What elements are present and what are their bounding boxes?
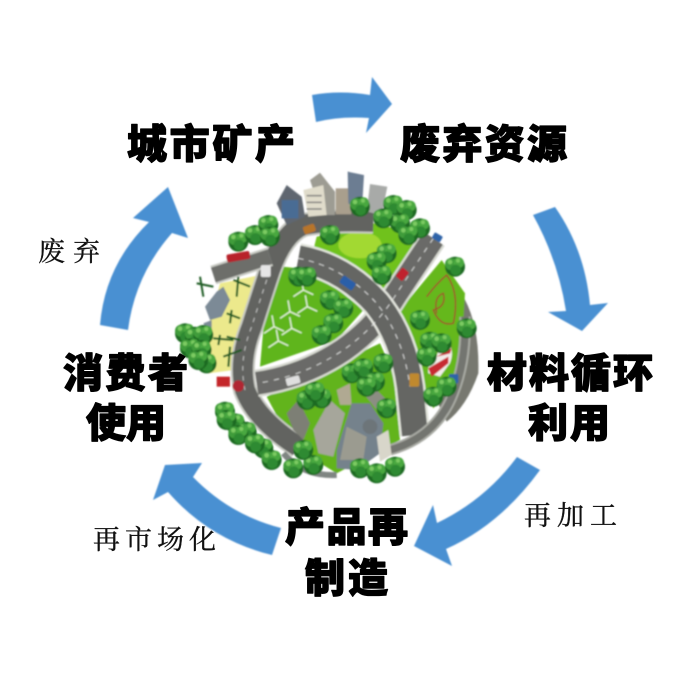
heading: consumer use: 消费者 xyxy=(63,352,188,396)
green land patches xyxy=(208,223,465,473)
carousel and red track xyxy=(427,275,456,377)
arrow: city mining to waste resources xyxy=(312,77,392,133)
cars xyxy=(217,223,458,392)
heading: material recycling: 材料循环 xyxy=(487,352,653,396)
bottom city buildings xyxy=(287,383,392,470)
heading: product remanufacturing xyxy=(285,506,408,601)
heading: consumer use: 使用 xyxy=(86,402,166,446)
heading: consumer use xyxy=(63,352,188,446)
arrow: remanufacturing to consumers xyxy=(153,463,281,555)
rocky rim xyxy=(433,287,478,422)
arrow: waste resources to material recycling xyxy=(533,207,608,331)
heading: city mining: 城市矿产 xyxy=(127,123,295,167)
label: reprocessing: 再加工 xyxy=(524,501,617,531)
arrow: material recycling to remanufacturing xyxy=(414,457,540,566)
heading: product remanufacturing: 制造 xyxy=(305,557,388,601)
top city buildings xyxy=(277,172,387,225)
globe illustration xyxy=(175,172,478,483)
heading: material recycling: 利用 xyxy=(528,402,610,446)
wind turbines xyxy=(264,279,317,348)
solar panels and palms xyxy=(197,277,250,367)
arrow: consumers to city mining xyxy=(100,187,188,330)
label: discard: 废弃 xyxy=(38,237,100,267)
heading: material recycling xyxy=(487,352,653,446)
roads xyxy=(213,221,465,475)
heading: product remanufacturing: 产品再 xyxy=(285,506,408,550)
heading: waste resources: 废弃资源 xyxy=(400,122,567,167)
trees xyxy=(175,195,477,483)
label: remarketing: 再市场化 xyxy=(93,525,216,555)
